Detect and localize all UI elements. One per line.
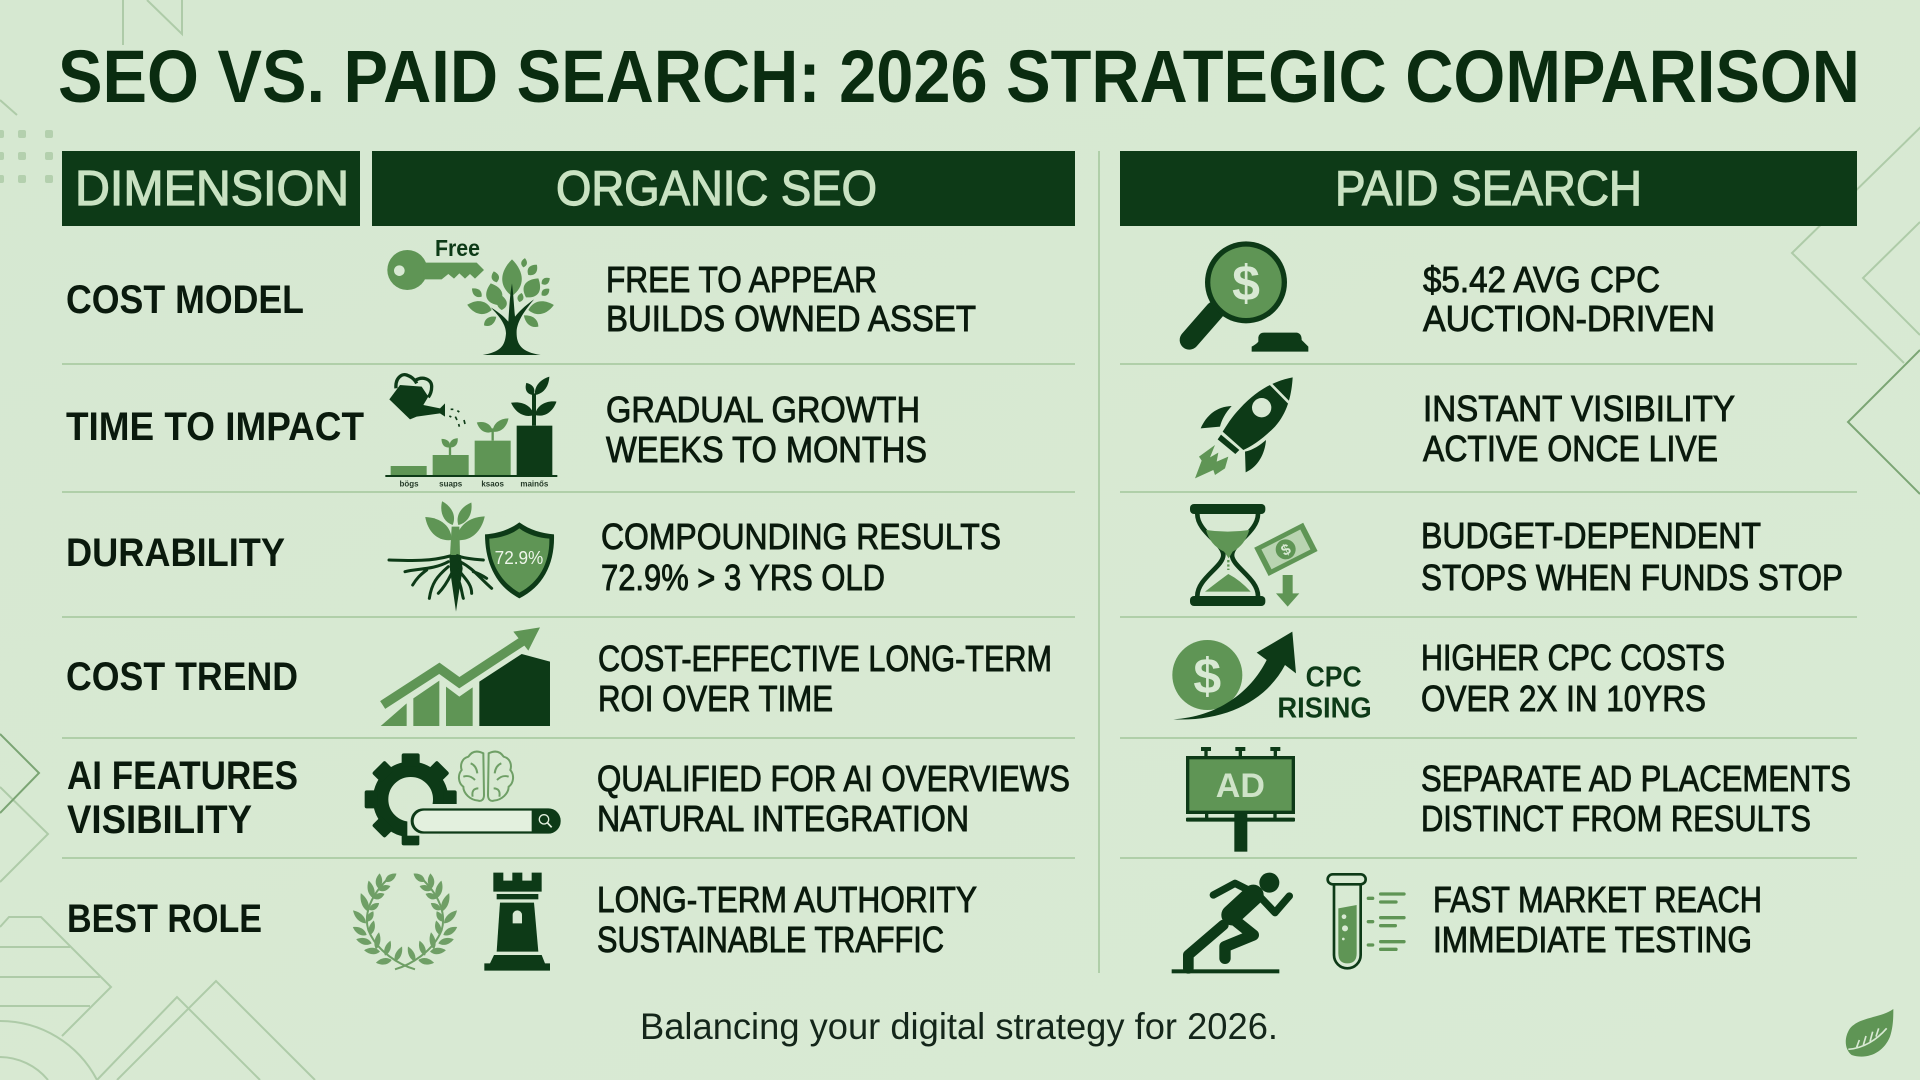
icon: brand leaf: [1846, 1009, 1893, 1057]
icon: ad billboard: AD: [1216, 767, 1265, 805]
icon: growing tree: [466, 258, 555, 355]
paid search column text: SEPARATE AD PLACEMENTS: [1421, 758, 1851, 799]
chart: growth bars with sprouts: bögs: [399, 480, 419, 489]
icons: organic seo rows 1-2: [385, 235, 559, 489]
icon: free key: Free: [435, 235, 480, 261]
icons: organic seo rows 3-6: [351, 499, 561, 971]
row labels: dimensions: VISIBILITY: [67, 798, 252, 842]
footer tagline: Balancing your digital strategy for 2026.: [640, 1006, 1278, 1047]
header: dimension: [62, 151, 360, 226]
icon: shield with 72.9%: [485, 522, 554, 598]
icon: laurel wreath: [351, 871, 459, 969]
organic seo column text: LONG-TERM AUTHORITY: [597, 879, 977, 920]
icon: watering can: [389, 375, 465, 427]
organic seo column text: [597, 259, 1070, 960]
paid search column text: HIGHER CPC COSTS: [1421, 637, 1725, 678]
paid search column text: AUCTION-DRIVEN: [1423, 298, 1715, 339]
paid search column text: $5.42 AVG CPC: [1423, 259, 1660, 300]
header: dimension: DIMENSION: [75, 162, 349, 216]
organic seo column text: QUALIFIED FOR AI OVERVIEWS: [597, 758, 1070, 799]
organic seo column text: GRADUAL GROWTH: [606, 389, 920, 430]
icon: rising cpc: CPC: [1306, 662, 1362, 694]
icon: gear, brain and search bar: [365, 752, 561, 848]
paid search column text: STOPS WHEN FUNDS STOP: [1421, 557, 1843, 598]
row labels: dimensions: DURABILITY: [66, 531, 285, 575]
chart: growth bars with sprouts: suaps: [439, 480, 463, 489]
row labels: dimensions: AI FEATURES: [67, 754, 298, 798]
header: organic seo: ORGANIC SEO: [556, 162, 877, 216]
organic seo column text: BUILDS OWNED ASSET: [606, 298, 976, 339]
icon: sprinting runner: [1172, 873, 1289, 973]
chart: growth bars with sprouts: [385, 374, 559, 489]
icon: magnifier with dollar and gavel base: $: [1232, 256, 1260, 312]
header: paid search: [1120, 151, 1857, 226]
paid search column text: DISTINCT FROM RESULTS: [1421, 798, 1811, 839]
paid search column text: INSTANT VISIBILITY: [1423, 388, 1735, 429]
organic seo column text: NATURAL INTEGRATION: [597, 798, 969, 839]
icon: hourglass and falling money: [1190, 504, 1318, 607]
icon: hourglass and falling money: $: [1279, 541, 1294, 560]
paid search column text: [1421, 259, 1851, 960]
icon: rising cpc: RISING: [1277, 692, 1372, 724]
row labels: dimensions: COST MODEL: [66, 278, 304, 322]
icon: ad billboard: [1186, 747, 1295, 852]
icon: free key: [387, 235, 484, 290]
organic seo column text: 72.9% > 3 YRS OLD: [601, 557, 885, 598]
organic seo column text: COST-EFFECTIVE LONG-TERM: [598, 638, 1052, 679]
icon: rook tower: [484, 873, 550, 971]
paid search column text: ACTIVE ONCE LIVE: [1423, 428, 1718, 469]
icon: rising cpc: $: [1193, 648, 1221, 704]
paid search column text: BUDGET-DEPENDENT: [1421, 515, 1761, 556]
icons: paid search rows 1-3: [1189, 241, 1318, 607]
icon: rooted sprout: [389, 499, 492, 612]
chart: growth bars with sprouts: ksaos: [481, 480, 505, 489]
organic seo column text: WEEKS TO MONTHS: [606, 429, 927, 470]
organic seo column text: FREE TO APPEAR: [606, 259, 877, 300]
organic seo column text: SUSTAINABLE TRAFFIC: [597, 919, 944, 960]
paid search column text: FAST MARKET REACH: [1433, 879, 1762, 920]
chart: growth bars with sprouts: mainős: [520, 480, 549, 489]
icon: rising cpc: [1172, 632, 1372, 724]
header: organic seo: [372, 151, 1075, 226]
chart: cost trend arrow and bars: [381, 627, 550, 726]
row labels: dimensions: COST TREND: [66, 655, 298, 699]
row labels: dimensions: TIME TO IMPACT: [66, 405, 364, 449]
icon: shield with 72.9%: 72.9%: [495, 547, 543, 568]
organic seo column text: COMPOUNDING RESULTS: [601, 516, 1001, 557]
paid search column text: IMMEDIATE TESTING: [1433, 919, 1752, 960]
icons: paid search rows 4-6: [1172, 632, 1404, 973]
paid search column text: OVER 2X IN 10YRS: [1421, 678, 1706, 719]
icon: test tube with data lines: [1328, 874, 1404, 968]
icon: rocket: [1195, 377, 1293, 478]
header: paid search: PAID SEARCH: [1335, 162, 1642, 216]
row labels: dimensions: [66, 278, 364, 941]
organic seo column text: ROI OVER TIME: [598, 678, 833, 719]
icon: magnifier with dollar and gavel base: [1189, 241, 1308, 352]
row labels: dimensions: BEST ROLE: [67, 897, 262, 941]
